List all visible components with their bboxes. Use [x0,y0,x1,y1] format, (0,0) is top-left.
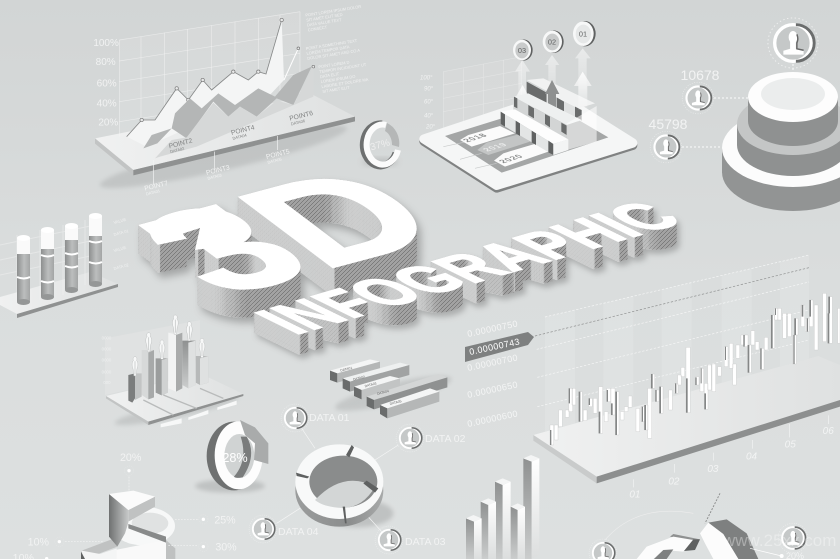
10% label: 10% [28,537,50,549]
tube notes: DATA 01 [113,228,130,237]
side notes: DATA ELIT [320,71,340,79]
column D [511,503,525,559]
axis labels: 0000 [102,369,112,374]
y axis labels: 80% [96,57,116,68]
block 1: DATA01 [340,366,353,373]
y axis labels: 40% [97,99,117,110]
column C [495,478,511,559]
left arc [637,534,700,559]
tube notes: VALUE [113,217,127,225]
30% label [199,542,237,554]
tube 4 [89,213,102,287]
main title: 3D: 3D [99,144,480,319]
axis labels: 01 [629,489,640,500]
point labels: DATA03 [207,172,223,181]
left slices [81,539,117,559]
line chart panel [93,4,370,198]
side notes: POINT LOREM IPSUM DOLOR [305,4,362,18]
tube 1 [17,235,30,305]
wall axis labels: 60° [424,99,434,105]
wall axis labels [420,75,436,141]
wall bands [545,255,809,432]
axis ticks [633,415,828,487]
ring gaps [296,445,378,523]
axis labels [629,426,834,500]
pie chart panel [13,452,237,559]
horizontal block chart [330,359,454,418]
3d column chart [466,455,539,559]
tube notes: DATA 02 [113,262,130,271]
tablet bar chart [420,21,633,188]
percent ring icon: 37% [369,138,391,153]
ring hole [224,434,254,478]
back bar row [527,78,595,122]
10% lower label [13,553,48,559]
block 5: DATA05 [389,399,402,406]
data badge 02: DATA 02 [425,433,466,445]
point labels: POINT3 [205,164,231,177]
tablet body [424,95,633,188]
point labels: POINT7 [144,180,169,193]
year ribbons: 2019 [480,141,510,153]
block 3: DATA03 [364,381,377,388]
candlestick chart [533,255,840,500]
tube 2 [41,227,54,300]
percent ring icon [362,123,399,166]
point labels: DATA06 [290,118,306,126]
dashed leader [705,493,720,523]
tablet side lines [443,142,497,168]
tube wall grid [0,220,95,305]
data badge 04 [249,515,319,543]
ring top face [295,444,383,519]
ring outer wall [295,455,383,527]
data badge 03: DATA 03 [405,536,446,548]
tube 3 [65,223,78,293]
wall axis labels: 40° [424,113,434,119]
label 600: 0.00000600 [466,408,519,429]
side notes: LOREM TEMPOR DATA [306,44,350,56]
ring wedge [240,420,268,464]
chart platform [95,95,355,175]
point labels: DATA05 [267,156,283,165]
candlestick platform [533,356,840,483]
point labels: DATA04 [232,132,248,141]
data badge 02 [396,424,466,452]
badge 02 [543,30,564,53]
point labels: POINT6 [289,110,314,123]
wall axis labels: 100° [420,75,433,81]
value 45798: 45798 [649,116,688,132]
wall axis labels: 20° [425,125,436,131]
side notes: SIT AMET ELIT SED [306,12,343,23]
point labels: POINT2 [168,138,193,150]
tube chart [0,213,130,318]
y axis labels: 20% [98,117,118,128]
ring inner wall [309,456,377,508]
stacked cake chart [722,72,840,211]
y axis labels [93,38,119,128]
chart grid wall [119,12,300,137]
tube notes [113,217,130,271]
axis labels [102,335,112,385]
tube platform [0,272,118,318]
badge 01: 01 [579,30,587,39]
ring shadow [195,479,265,493]
front labels [161,401,237,427]
lower cylinder [112,507,175,559]
column B [481,498,496,559]
10% label [28,537,64,549]
person pins [132,315,205,376]
ring hole floor [315,481,375,508]
wall axis labels: 90° [424,87,434,93]
axis labels: 0000 [102,358,112,363]
ring chart 28% [195,420,268,493]
block 2: DATA02 [353,375,365,382]
side notes: TEMPOR INCIDIDUNT UT [319,62,367,74]
axis labels: 0000 [102,347,112,352]
segmented ring chart [277,428,398,532]
point labels: DATA02 [170,146,186,154]
label 650: 0.00000650 [466,379,519,400]
side notes: CONSECT [307,24,328,32]
icon: person bottom left [589,539,617,559]
front bar row [501,109,568,155]
20% label: 20% [120,452,142,464]
middle bar row [513,93,597,150]
20% label [120,452,142,475]
label 700: 0.00000700 [466,352,519,373]
connector lines [682,62,793,147]
axis labels: 0000 [102,335,112,340]
leader lines [65,477,198,546]
y axis labels: 100% [93,38,119,49]
person bar chart [102,315,243,430]
25% label: 25% [214,514,236,526]
platform [106,373,243,425]
axis labels: 06 [823,426,834,437]
series light area [155,67,313,158]
side notes: DOLOR SIT AMET AND CO A [307,48,361,61]
point labels [144,110,315,196]
30% label: 30% [215,542,237,554]
ring wall [207,422,261,490]
side notes: LABORE ET DOLORE MA [321,77,369,89]
year ribbons: 2020 [496,153,526,164]
badge 01 [573,21,596,46]
wall axis labels: 0° [428,135,435,141]
point labels: POINT5 [265,148,291,161]
block 4: DATA04 [377,389,389,396]
label 750: 0.00000750 [466,318,519,339]
icon: person top [768,18,818,68]
side notes: SIT AMET ELIT [322,85,350,94]
candles [550,293,840,445]
connector lines [277,428,398,532]
column A [466,515,482,559]
ring shadow [320,499,393,527]
side notes [305,4,370,94]
badge 03 [513,39,533,61]
axis labels: 04 [746,451,758,462]
value 10678: 10678 [681,67,720,83]
price tag: 0.00000743 [468,336,521,357]
axis labels: 02 [668,476,680,487]
dashed levels [535,255,809,407]
series white area [127,18,315,147]
tablet screen [445,103,608,173]
point labels: POINT4 [230,124,256,137]
watermark: www.25xx.com [722,531,836,550]
axis labels: 03 [707,464,719,475]
faint arrow shafts [515,48,591,110]
data badge 04: DATA 04 [278,526,319,538]
price labels [465,318,534,429]
side notes: POINT LOREM D [318,59,350,69]
icon: person bottom right [778,523,808,553]
right arc [700,519,758,559]
bars [128,333,208,403]
axis labels: 000 [103,380,111,385]
data badge 01 [281,404,350,432]
bottom right ring chart [605,493,784,559]
point labels: DATA01 [145,188,161,196]
side notes: LOREM IPSUM DO [320,74,356,84]
point leader lines [153,136,277,185]
grey arrow [545,80,559,108]
year ribbons: 2018 [460,132,490,143]
side notes: POINT A SOMETHING TEXT [305,38,358,51]
wall [105,320,200,395]
ring label: 28% [222,451,248,465]
y axis labels: 60% [97,79,117,90]
ring face [215,421,263,489]
white arrows [515,72,592,113]
thin arcs [605,511,693,540]
badge 02: 02 [548,38,556,47]
badge 03: 03 [518,46,526,55]
25% label [199,514,236,526]
side notes: DATA VALUE TEXT [307,17,342,28]
icon: person 10678 [682,82,714,114]
data badge 01: DATA 01 [309,412,350,424]
series grey area [143,67,312,148]
year ribbons [460,126,548,167]
label line [750,548,782,556]
top wedge [109,491,155,547]
icon: person 45798 [650,131,682,163]
main title: INFOGRAPHIC: INFOGRAPHIC [238,194,699,342]
tube notes: VALUE [113,245,127,253]
axis labels: 05 [785,439,796,450]
data badge 03 [375,526,446,554]
back grid wall [443,57,522,132]
column E [523,455,539,559]
